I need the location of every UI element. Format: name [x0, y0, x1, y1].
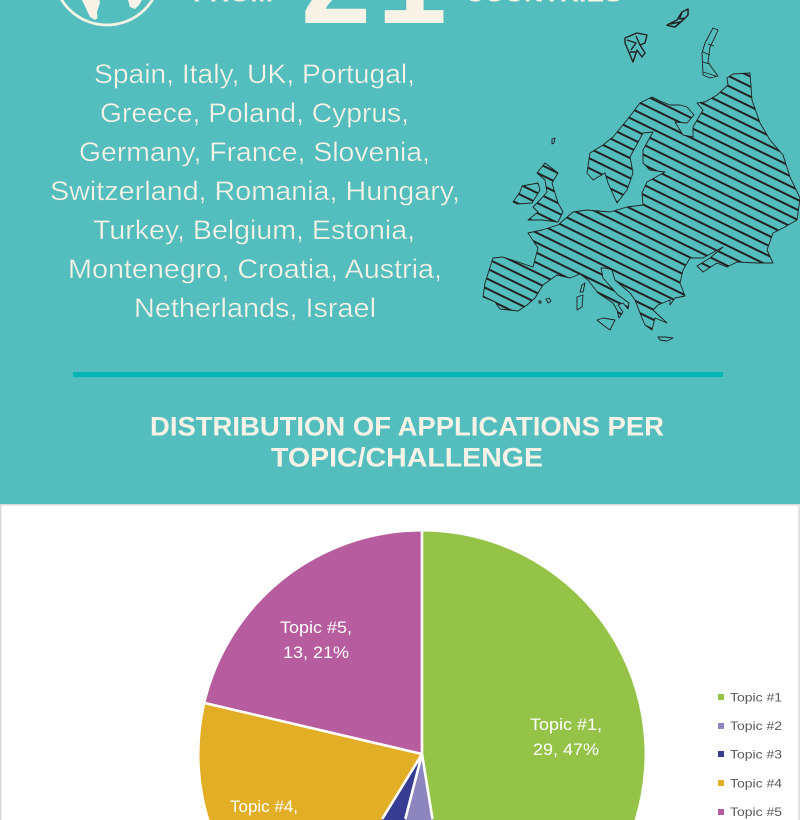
- legend item: topic 4: Topic #4: [730, 776, 782, 790]
- pie data labels: Topic #5,: [280, 618, 352, 637]
- panel: chart background: [0, 504, 800, 820]
- heading: distribution of applications: DISTRIBUTION OF APPLICATIONS PER: [150, 412, 664, 442]
- legend item: topic 5: Topic #5: [730, 805, 782, 819]
- legend item: topic 3: Topic #3: [730, 748, 782, 762]
- map: Great Britain: [528, 163, 563, 222]
- map: Corsica: [580, 283, 585, 292]
- icon: globe: [54, 0, 160, 25]
- text block: country list: Turkey, Belgium, Estonia,: [93, 215, 415, 245]
- text block: country list: Germany, France, Slovenia,: [79, 137, 430, 167]
- slice: topic 1: [422, 532, 645, 820]
- map: Iceland fragment: [552, 138, 555, 144]
- text block: country list: Spain, Italy, UK, Portugal,: [94, 59, 415, 89]
- heading: distribution of applications: [150, 412, 664, 472]
- heading: distribution of applications: TOPIC/CHALLENGE: [271, 442, 543, 472]
- headline: from 21 countries: [193, 0, 622, 50]
- map: Franz Josef Land: [667, 9, 688, 27]
- text block: country list: Switzerland, Romania, Hungary,: [50, 176, 460, 206]
- text block: country list: Montenegro, Croatia, Austria,: [68, 254, 442, 284]
- map: Novaya Zemlya: [702, 28, 718, 78]
- text block: country list: Netherlands, Israel: [134, 293, 376, 323]
- map: hatched Europe: [483, 9, 800, 341]
- legend: [718, 690, 782, 819]
- text block: country list: Greece, Poland, Cyprus,: [100, 98, 409, 128]
- text block: country list: [50, 59, 460, 323]
- pie data labels: Topic #4,: [230, 797, 298, 816]
- map: Sicily: [597, 318, 615, 330]
- divider: [73, 372, 723, 377]
- pie chart: [200, 531, 645, 820]
- slice: topic 5: [205, 532, 422, 754]
- map: Balearic islands: [539, 298, 551, 303]
- pie data labels: 29, 47%: [533, 740, 599, 759]
- pie data labels: Topic #1,: [530, 715, 602, 734]
- slice: topic 4: [200, 703, 422, 820]
- legend item: topic 2: Topic #2: [730, 719, 782, 733]
- map: Crete: [658, 337, 673, 341]
- map: Svalbard: [625, 33, 647, 62]
- slice: topic 2: [405, 754, 432, 820]
- legend item: topic 1: Topic #1: [730, 690, 782, 704]
- map: Sardinia: [577, 295, 583, 310]
- pie data labels: [230, 618, 602, 816]
- slice: topic 3: [382, 754, 422, 820]
- map: Ireland: [513, 183, 540, 204]
- pie data labels: 13, 21%: [283, 643, 349, 662]
